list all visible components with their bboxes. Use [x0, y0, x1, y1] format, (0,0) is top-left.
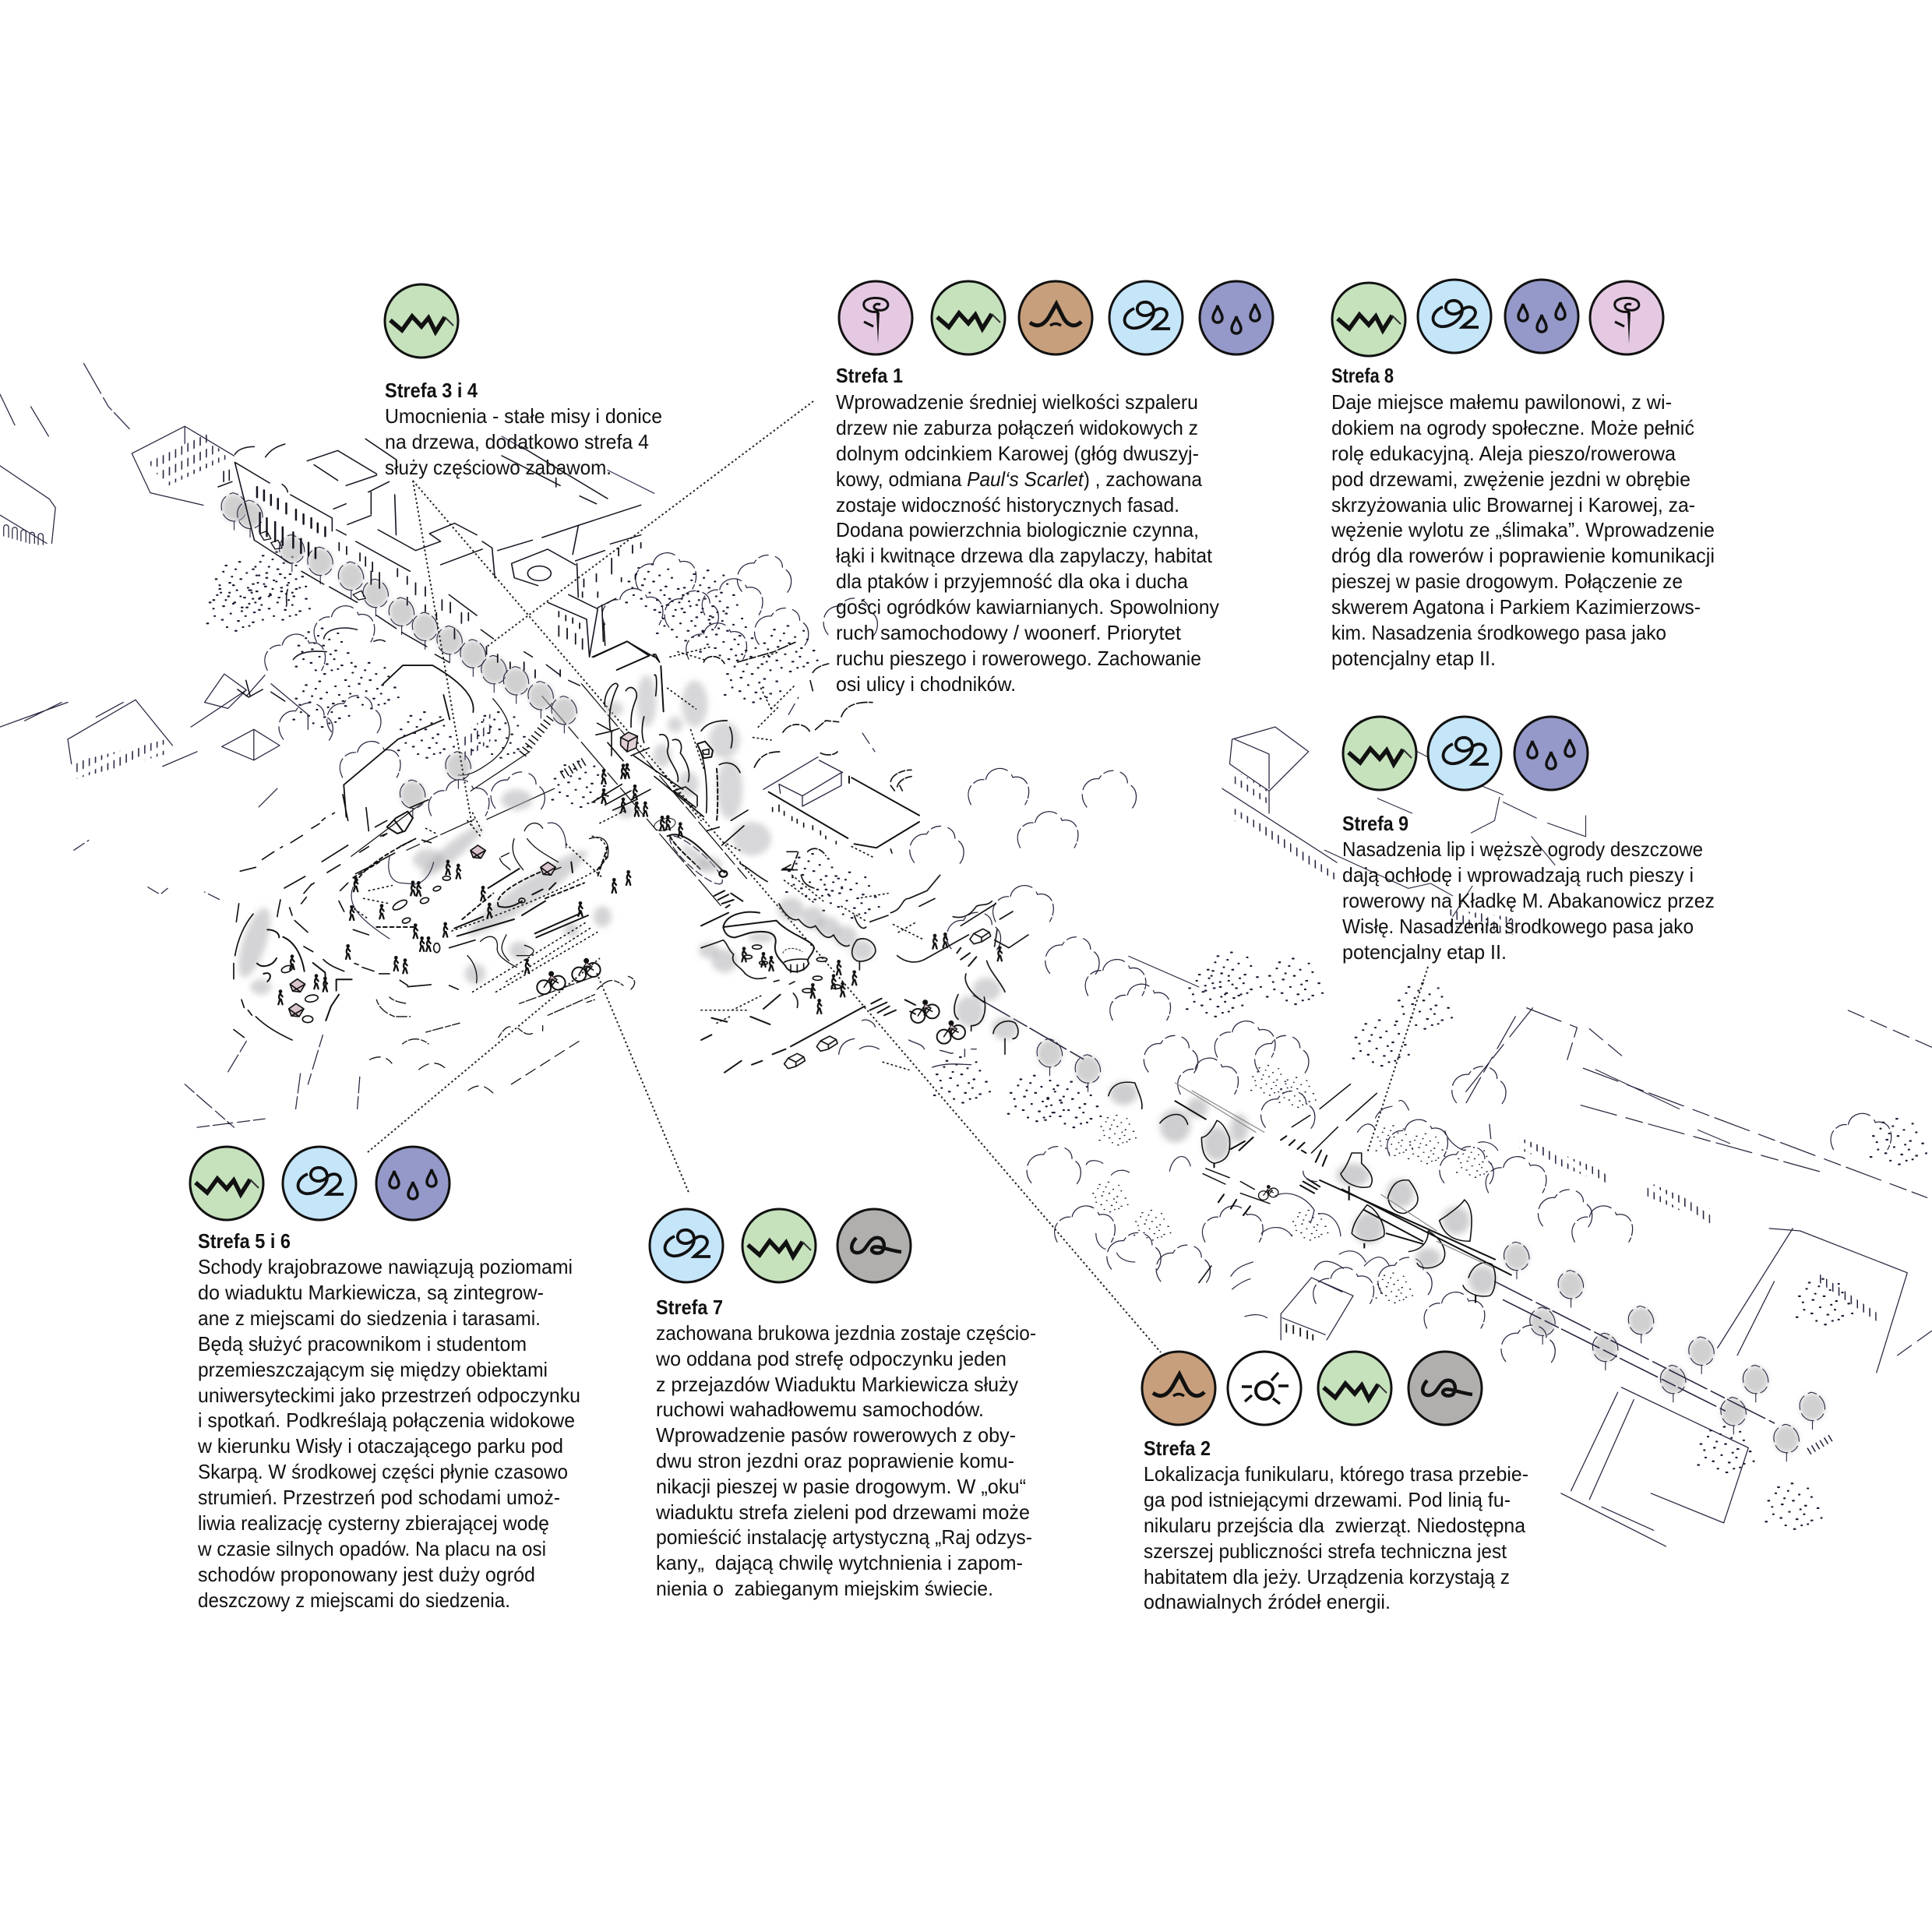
panel: Strefa 3 i 4: [385, 284, 662, 479]
text block: Strefa 8: [1331, 390, 1715, 670]
text block: Strefa 8: skrzyżowania ulic Browarnej i Karowej, za-: [1331, 493, 1695, 516]
text block: Strefa 9: potencjalny etap II.: [1342, 940, 1507, 964]
icon row: Strefa 8: [1332, 280, 1663, 356]
text block: Strefa 2: [1144, 1462, 1528, 1613]
heading: Strefa 3 i 4: Strefa 3 i 4: [385, 379, 478, 402]
text block: Strefa 8: skwerem Agatona i Parkiem Kazimierzows-: [1331, 595, 1701, 619]
text block: Strefa 9: [1342, 837, 1715, 964]
text block: Strefa 7: ruchowi wahadłowemu samochodów.: [656, 1398, 984, 1421]
text block: Strefa 8: pieszej w pasie drogowym. Połączenie ze: [1331, 569, 1683, 593]
text block: Strefa 2: szerszej publiczności strefa techniczna jest: [1144, 1539, 1507, 1563]
icon row: Strefa 7: [650, 1209, 911, 1282]
text block: Strefa 5 i 6: Skarpą. W środkowej części płynie czasowo: [198, 1460, 568, 1483]
text block: Strefa 7: Wprowadzenie pasów rowerowych z oby-: [656, 1423, 1016, 1447]
text block: Strefa 1: zostaje widoczność historycznych fasad.: [836, 493, 1179, 516]
text block: Strefa 1: dla ptaków i przyjemność dla oka i ducha: [836, 569, 1189, 593]
text block: Strefa 1: łąki i kwitnące drzewa dla zapylaczy, habitat: [836, 544, 1213, 567]
text block: Strefa 3 i 4: na drzewa, dodatkowo strefa 4: [385, 430, 649, 453]
text block: Strefa 8: pod drzewami, zwężenie jezdni w obrębie: [1331, 467, 1690, 491]
text block: Strefa 5 i 6: liwia realizację cysterny zbierającej wodę: [198, 1511, 549, 1535]
heading: Strefa 1: Strefa 1: [836, 364, 903, 387]
text block: Strefa 2: odnawialnych źródeł energii.: [1144, 1590, 1391, 1613]
text block: Strefa 1: Wprowadzenie średniej wielkości szpaleru: [836, 390, 1198, 414]
heading: Strefa 7: Strefa 7: [656, 1296, 723, 1319]
text block: Strefa 7: wiaduktu strefa zieleni pod drzewami może: [655, 1500, 1030, 1524]
text block: Strefa 8: wężenie wylotu ze „ślimaka”. Wprowadzenie: [1331, 518, 1715, 541]
text block: Strefa 9: rowerowy na Kładkę M. Abakanowicz przez: [1342, 889, 1715, 912]
text block: Strefa 1: gości ogródków kawiarnianych. Spowolniony: [836, 595, 1219, 619]
text block: Strefa 7: nienia o zabieganym miejskim świecie.: [656, 1577, 993, 1600]
sketch: main facade with windows and upper building blocks: [218, 436, 654, 701]
sketch: central oval stairs, seating, people and cyclists: [232, 789, 635, 1044]
text block: Strefa 8: dokiem na ogrody społeczne. Może pełnić: [1331, 416, 1694, 439]
text block: Strefa 2: habitatem dla jeży. Urządzenia korzystają z: [1144, 1565, 1510, 1588]
text block: Strefa 7: wo oddana pod strefę odpoczynku jeden: [655, 1347, 1007, 1370]
text block: Strefa 1: drzew nie zaburza połączeń widokowych z: [836, 416, 1198, 439]
text block: Strefa 5 i 6: Schody krajobrazowe nawiązują poziomami: [198, 1255, 573, 1278]
text block: Strefa 7: z przejazdów Wiaduktu Markiewicza służy: [656, 1373, 1018, 1396]
text block: Strefa 7: [655, 1321, 1036, 1600]
text block: Strefa 5 i 6: deszczowy z miejscami do siedzenia.: [198, 1588, 510, 1612]
text block: Strefa 9: Nasadzenia lip i węższe ogrody deszczowe: [1342, 837, 1703, 861]
heading: Strefa 8: Strefa 8: [1331, 364, 1394, 387]
text block: Strefa 7: pomieścić instalację artystyczną „Raj odzys-: [656, 1525, 1032, 1549]
text block: Strefa 1: [836, 390, 1219, 696]
text block: Strefa 1: ruchu pieszego i rowerowego. Zachowanie: [836, 647, 1201, 670]
text block: Strefa 3 i 4: Umocnienia - stałe misy i donice: [385, 404, 662, 428]
panel: Strefa 1: [836, 281, 1273, 696]
text block: Strefa 3 i 4: [385, 404, 662, 479]
text block: Strefa 5 i 6: i spotkań. Podkreślają połączenia widokowe: [198, 1408, 575, 1432]
text block: Strefa 8: dróg dla rowerów i poprawienie komunikacji: [1331, 544, 1715, 567]
text block: Strefa 7: nikacji pieszej w pasie drogowym. W „oku“: [656, 1475, 1026, 1498]
sketch: curved building, road bend and pedestrian crossings: [344, 665, 746, 1093]
sketch: upper crossing, park, kiosk and pavilion: [592, 623, 919, 873]
text block: Strefa 2: Lokalizacja funikularu, którego trasa przebie-: [1144, 1462, 1528, 1486]
text block: Strefa 8: rolę edukacyjną. Aleja pieszo/rowerowa: [1331, 442, 1676, 465]
text block: Strefa 5 i 6: strumień. Przestrzeń pod schodami umoż-: [198, 1486, 560, 1509]
text block: Strefa 1: Dodana powierzchnia biologicznie czynna,: [836, 518, 1199, 541]
text block: Strefa 5 i 6: schodów proponowany jest duży ogród: [198, 1563, 535, 1586]
panel: Strefa 2: [1142, 1352, 1528, 1613]
icon row: Strefa 5 i 6: [190, 1147, 450, 1220]
text block: Strefa 5 i 6: przemieszczającym się między obiektami: [198, 1358, 548, 1381]
text block: Strefa 5 i 6: Będą służyć pracownikom i studentom: [198, 1332, 527, 1356]
text block: Strefa 5 i 6: [197, 1255, 580, 1612]
icon: zigzag: [385, 284, 458, 358]
heading: Strefa 5 i 6: Strefa 5 i 6: [198, 1229, 291, 1253]
text block: Strefa 5 i 6: uniwersyteckimi jako przestrzeń odpoczynku: [198, 1384, 580, 1407]
sketch: isometric street drawing: [0, 364, 1932, 1546]
sketch: avenue crossing with bicycle and funicular trees: [1086, 1066, 1511, 1340]
panel: Strefa 5 i 6: [190, 1147, 580, 1612]
text block: Strefa 7: dwu stron jezdni oraz poprawienie komu-: [656, 1449, 1014, 1472]
text block: Strefa 1: osi ulicy i chodników.: [836, 672, 1016, 696]
text block: Strefa 9: dają ochłodę i wprowadzają ruch pieszy i: [1342, 863, 1694, 887]
text block: Strefa 8: potencjalny etap II.: [1331, 647, 1496, 670]
panel: Strefa 9: [1342, 717, 1715, 964]
text block: Strefa 5 i 6: w czasie silnych opadów. Na placu na osi: [197, 1537, 546, 1560]
sketch: right-side city blocks: [1129, 721, 1932, 1546]
heading: Strefa 2: Strefa 2: [1144, 1437, 1211, 1460]
text block: Strefa 1: dolnym odcinkiem Karowej (głóg dwuszyj-: [836, 442, 1199, 465]
text block: Strefa 2: ga pod istniejącymi drzewami. Pod linią fu-: [1144, 1488, 1511, 1511]
panel: Strefa 8: [1331, 280, 1715, 670]
sketch: avenue trees and surrounding canopy: [910, 768, 1927, 1529]
heading: Strefa 9: Strefa 9: [1342, 812, 1408, 835]
text block: Strefa 5 i 6: ane z miejscami do siedzenia i tarasami.: [198, 1306, 541, 1330]
text block: Strefa 1: ruch samochodowy / woonerf. Priorytet: [836, 621, 1182, 644]
sketch: far-left and north-west context buildings: [0, 364, 400, 1127]
sketch: row of trees along the historic facade: [221, 493, 576, 817]
sketch: rain garden plaza, crossing, cars and cyclists: [696, 857, 1028, 1073]
text block: Strefa 8: kim. Nasadzenia środkowego pasa jako: [1331, 621, 1666, 644]
text block: Strefa 3 i 4: służy częściowo zabawom.: [385, 456, 612, 479]
text block: Strefa 7: kany„ dającą chwilę wytchnienia i zapom-: [656, 1551, 1023, 1574]
icon row: Strefa 1: [839, 281, 1273, 354]
text block: Strefa 9: Wisłę. Nasadzenia środkowego pasa jako: [1342, 915, 1694, 938]
text block: Strefa 2: nikularu przejścia dla zwierząt. Niedostępna: [1144, 1514, 1526, 1537]
icon row: Strefa 2: [1142, 1352, 1482, 1425]
text block: Strefa 1: kowy, odmiana Paul‘s Scarlet) , zachowana: [836, 467, 1202, 491]
text block: Strefa 7: zachowana brukowa jezdnia zostaje częścio-: [656, 1321, 1036, 1345]
icon row: Strefa 9: [1343, 717, 1588, 790]
sketch: upper-centre park trees: [602, 553, 880, 918]
text block: Strefa 8: Daje miejsce małemu pawilonowi, z wi-: [1331, 390, 1672, 414]
text block: Strefa 5 i 6: w kierunku Wisły i otaczającego parku pod: [197, 1434, 563, 1458]
leader lines: dotted connectors: [368, 401, 1428, 1352]
text block: Strefa 5 i 6: do wiaduktu Markiewicza, są zintegrow-: [198, 1281, 544, 1304]
panel: Strefa 7: [650, 1209, 1036, 1600]
